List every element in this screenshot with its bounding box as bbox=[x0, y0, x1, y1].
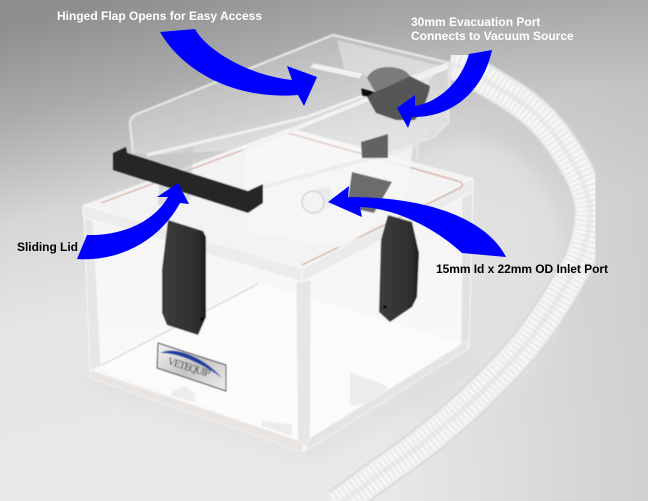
left bracket bbox=[158, 146, 194, 205]
flap strip bbox=[147, 63, 450, 155]
black lid handle bar bbox=[113, 147, 263, 213]
label: sliding lid: Sliding Lid bbox=[17, 240, 78, 254]
right rear post bbox=[461, 190, 473, 350]
main chamber box bbox=[83, 128, 473, 452]
chamber interior bbox=[83, 128, 473, 452]
sliding lid assembly bbox=[130, 35, 450, 248]
top surface bbox=[83, 128, 473, 268]
port lower body bbox=[367, 76, 430, 120]
port black gasket bbox=[361, 88, 375, 97]
latch hole bbox=[200, 317, 204, 321]
right base rail bbox=[305, 340, 468, 451]
second strip bbox=[243, 66, 450, 190]
red gasket bbox=[101, 133, 463, 265]
port reflection bbox=[361, 134, 388, 158]
floor reflections bbox=[172, 372, 387, 436]
evacuation port bbox=[361, 67, 430, 120]
left clear panel bbox=[130, 35, 450, 155]
front base rail bbox=[90, 370, 303, 452]
right lid side bbox=[417, 63, 450, 160]
label: evacuation port: Connects to Vacuum Source bbox=[411, 29, 574, 43]
latch hole bbox=[383, 305, 387, 309]
inlet opening bbox=[302, 191, 324, 213]
latch body bbox=[162, 220, 206, 335]
left front wall edge bbox=[84, 218, 101, 371]
left latch bbox=[162, 220, 206, 335]
right latch bbox=[379, 215, 419, 322]
label: hinged flap: Hinged Flap Opens for Easy Access bbox=[57, 9, 262, 23]
badge plate bbox=[157, 343, 226, 391]
badge swoosh bbox=[160, 351, 222, 378]
lid top pane bbox=[147, 66, 450, 190]
chamber shadow bbox=[80, 350, 478, 462]
rear window bbox=[337, 40, 440, 88]
chamber floor bbox=[93, 283, 465, 442]
rear floor edge bbox=[100, 284, 258, 366]
latch body bbox=[379, 215, 419, 322]
VetEquip badge bbox=[157, 343, 226, 391]
lower strip bbox=[263, 147, 413, 187]
inlet port bbox=[302, 186, 334, 213]
port upper collar bbox=[367, 67, 410, 92]
arrow: inlet port bbox=[328, 186, 506, 257]
arrow: evacuation port bbox=[397, 50, 492, 128]
label: inlet port: 15mm Id x 22mm OD Inlet Port bbox=[436, 262, 608, 276]
front top rim bbox=[83, 205, 302, 282]
left panel outline bbox=[130, 35, 450, 153]
badge wordmark: VETEQUIP bbox=[166, 356, 212, 380]
inlet tube bbox=[312, 186, 334, 213]
bracket bbox=[347, 172, 392, 213]
front corner post bbox=[296, 280, 311, 447]
product photo layer bbox=[83, 35, 473, 452]
right top rim bbox=[302, 178, 473, 282]
arrow: hinged flap bbox=[160, 29, 317, 106]
label: evacuation port: 30mm Evacuation Port bbox=[411, 15, 540, 29]
arrow: sliding lid bbox=[77, 183, 189, 259]
warning label bbox=[310, 63, 363, 79]
lid inner front panel bbox=[243, 147, 413, 248]
vacuum hose bbox=[335, 64, 590, 501]
